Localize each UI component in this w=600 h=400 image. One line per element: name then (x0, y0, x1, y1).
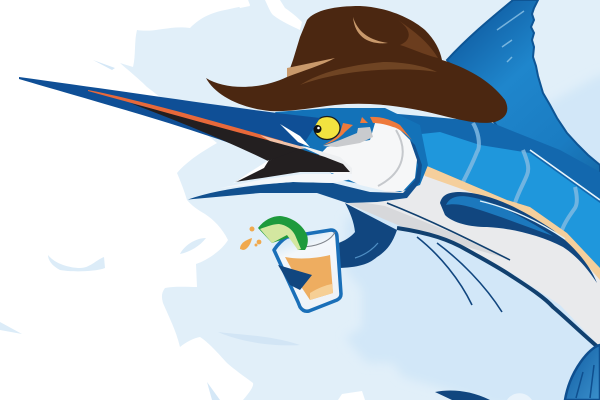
eye (314, 116, 340, 140)
drink: finger over glass (278, 265, 312, 290)
arm highlight (355, 243, 378, 258)
cheek shading (378, 130, 403, 186)
fin highlights (497, 11, 524, 62)
body: bright blue flank (412, 132, 600, 270)
whiskers (417, 237, 502, 312)
bill: upper (19, 77, 320, 161)
tan stripe (420, 163, 600, 280)
head: white cheek (310, 123, 417, 191)
lower fin (435, 391, 490, 400)
pectoral fin (440, 192, 597, 283)
belly inner line (387, 203, 510, 260)
drink: lime wedge (258, 216, 308, 250)
head: orange stripe (370, 117, 412, 140)
eye patch: orange and grey (323, 117, 373, 147)
lower jaw (220, 160, 352, 188)
head: blue top (275, 108, 428, 192)
belly: white (330, 165, 600, 347)
drink: splash droplets (240, 226, 261, 250)
body: dark blue back (330, 108, 600, 270)
body: lateral white line (530, 150, 600, 200)
arm fin holding glass (336, 203, 397, 268)
hat (206, 6, 507, 123)
dorsal fin (447, 0, 600, 230)
head: navy cheek outline (188, 135, 422, 203)
upper lip: white (300, 146, 352, 178)
body: light vertical bars (460, 123, 577, 230)
mouth interior (235, 149, 350, 182)
belly outline: dark lower edge (397, 228, 600, 349)
tail fin (565, 345, 600, 400)
drink: shot glass (274, 230, 341, 311)
